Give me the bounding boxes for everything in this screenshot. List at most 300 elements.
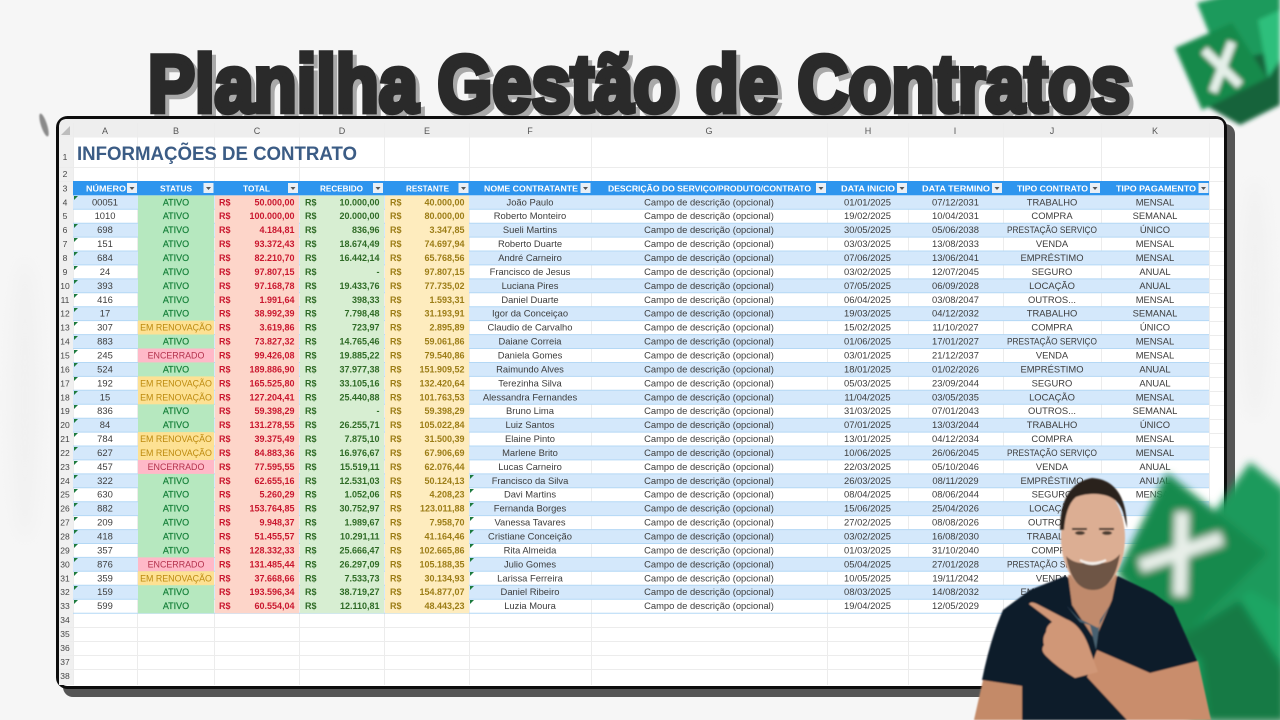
table row 11: Daniel Duarte — [501, 294, 559, 305]
table row 6: R$ — [305, 225, 317, 235]
table row 19: 31/03/2025 — [844, 405, 891, 416]
table row 24: 62.655,16 — [254, 476, 294, 486]
table row 17 — [97, 377, 1171, 388]
table row 12: ATIVO — [163, 309, 189, 319]
row numbers: 2 — [63, 169, 68, 179]
table row 15: 03/01/2025 — [844, 350, 891, 360]
table row 9: 24 — [100, 266, 110, 277]
table row 18: R$ — [219, 392, 231, 402]
table row 19: 836 — [97, 405, 113, 416]
table row 5: SEMANAL — [1133, 210, 1177, 221]
table row 12: 19/03/2025 — [844, 308, 891, 319]
table row 23: R$ — [219, 462, 231, 472]
sheet heading: INFORMAÇÕES DE CONTRATO — [77, 143, 357, 165]
table row 18: MENSAL — [1136, 391, 1174, 402]
table row 12: Campo de descrição (opcional) — [644, 308, 774, 319]
table row 20 — [100, 419, 1170, 430]
table row 28: TRABALHO — [1027, 530, 1077, 542]
table row 12: Igor da Conceiçao — [492, 308, 568, 319]
table row 15: R$ — [305, 350, 317, 360]
table row 16: 01/02/2026 — [932, 363, 979, 374]
table row 28: R$ — [219, 532, 231, 542]
table row 22: 627 — [97, 447, 113, 458]
table row 8: EMPRÉSTIMO — [1020, 252, 1084, 263]
table row 16: 151.909,52 — [419, 364, 464, 374]
table row 4: 50.000,00 — [254, 197, 294, 207]
table row 26: 123.011,88 — [420, 504, 464, 514]
table row 7: 74.697,94 — [424, 239, 464, 249]
table row 14: 883 — [97, 336, 113, 346]
table row 15: VENDA — [1036, 350, 1069, 360]
table row 26: 25/04/2026 — [932, 503, 979, 514]
table row 30: 26.297,09 — [339, 559, 380, 569]
table row 32: Campo de descrição (opcional) — [644, 586, 774, 597]
row numbers — [60, 152, 70, 681]
table row 22: Marlene Brito — [502, 447, 558, 458]
table row 19: Bruno Lima — [506, 405, 555, 416]
table row 22: 84.883,36 — [254, 448, 294, 458]
table row 22: MENSAL — [1136, 447, 1174, 458]
table row 5: R$ — [390, 211, 402, 221]
table row 26: R$ — [390, 504, 402, 514]
table row 32: ATIVO — [163, 587, 189, 597]
table row 20: 13/03/2044 — [932, 419, 979, 430]
table row 25: R$ — [305, 490, 317, 500]
table row 17: R$ — [219, 378, 231, 388]
table row 12 — [100, 308, 1177, 319]
table row 12: 38.992,39 — [254, 309, 294, 319]
row numbers: 24 — [60, 476, 70, 486]
table row 20: 07/01/2025 — [844, 419, 891, 430]
table row 33: Luzia Moura — [504, 600, 557, 611]
table row 25: 1.052,06 — [344, 490, 380, 500]
table row 30: R$ — [390, 559, 402, 569]
table row 10: R$ — [219, 281, 231, 291]
table row 18 — [100, 391, 1174, 402]
table row 27: 1.989,67 — [344, 518, 380, 528]
table row 15: R$ — [390, 350, 402, 360]
table row 28: 16/08/2030 — [932, 530, 979, 542]
table row 28: Campo de descrição (opcional) — [644, 530, 774, 542]
table row 25: R$ — [390, 490, 402, 500]
head — [1060, 478, 1127, 590]
table row 12: 17 — [100, 308, 110, 319]
table row 21: EM RENOVAÇÃO — [140, 434, 212, 444]
table row 33: ATIVO — [163, 601, 189, 611]
table row 32: 154.877,07 — [419, 587, 464, 597]
table row 5: ATIVO — [163, 211, 189, 221]
table row 26: R$ — [305, 504, 317, 514]
table row 17: R$ — [305, 378, 317, 388]
table row 19 — [97, 405, 1177, 416]
table row 16: 37.977,38 — [339, 364, 380, 374]
table row 25: ATIVO — [163, 490, 189, 500]
table row 30: 131.485,44 — [249, 559, 294, 569]
table row 7: R$ — [390, 239, 402, 249]
table row 14: R$ — [219, 336, 231, 346]
column letter header bar: J — [1050, 126, 1054, 136]
row numbers: 20 — [60, 420, 70, 430]
row numbers: 35 — [60, 629, 70, 639]
table header row — [73, 181, 1209, 195]
table row 33 — [97, 600, 979, 611]
table row 29: 128.332,33 — [249, 545, 294, 555]
table row 4: 01/01/2025 — [844, 196, 891, 207]
table row 28: ATIVO — [163, 532, 189, 542]
table row 32: R$ — [390, 587, 402, 597]
table row 4: 40.000,00 — [424, 197, 464, 207]
table row 29: Rita Almeida — [504, 544, 557, 555]
table row 7 — [97, 238, 1174, 249]
table row 13: 723,97 — [352, 323, 380, 333]
table row 29: 357 — [97, 544, 113, 555]
table row 19: ATIVO — [163, 406, 189, 416]
table row 11 — [97, 294, 1174, 305]
table row 25: 08/04/2025 — [844, 489, 891, 500]
table row 12: R$ — [390, 309, 402, 319]
table row 8: 13/06/2041 — [932, 252, 979, 263]
table row 6: 30/05/2025 — [844, 224, 891, 235]
table row 13 — [97, 322, 1170, 333]
table row 26: ATIVO — [163, 504, 189, 514]
table row 4: 07/12/2031 — [932, 196, 979, 207]
table row 31: 7.533,73 — [344, 573, 380, 583]
table row 29: COMPRA — [1031, 544, 1073, 555]
table row 13: COMPRA — [1031, 322, 1073, 333]
table row 29: 102.665,86 — [419, 545, 464, 555]
table row 15: R$ — [219, 350, 231, 360]
table row 17: 192 — [97, 377, 113, 388]
table row 7: MENSAL — [1136, 238, 1174, 249]
row numbers: 27 — [60, 518, 70, 528]
table row 16 — [97, 363, 1171, 374]
table row 10: 07/05/2025 — [844, 280, 891, 291]
table row 12: R$ — [219, 309, 231, 319]
table row 8: R$ — [219, 253, 231, 263]
table row 19: SEMANAL — [1133, 405, 1177, 416]
column letter header bar — [59, 119, 1224, 685]
table row 21: 39.375,49 — [254, 434, 294, 444]
table row 22: R$ — [305, 448, 317, 458]
table row 6: R$ — [219, 225, 231, 235]
table row 25: R$ — [219, 490, 231, 500]
table row 15 — [97, 350, 1174, 360]
table header row: TIPO CONTRATO — [1017, 184, 1089, 194]
table row 13: Campo de descrição (opcional) — [644, 322, 774, 333]
table row 27: 209 — [97, 517, 113, 528]
table row 31: 19/11/2042 — [932, 572, 979, 583]
table row 23: 62.076,44 — [424, 462, 464, 472]
table row 16: 18/01/2025 — [844, 363, 891, 374]
table row 8: ATIVO — [163, 253, 189, 263]
table row 32 — [97, 586, 1084, 597]
table row 26: 15/06/2025 — [844, 503, 891, 514]
table row 22: R$ — [219, 448, 231, 458]
table row 14: R$ — [390, 336, 402, 346]
table row 24: 26/03/2025 — [844, 475, 891, 486]
table row 28: R$ — [305, 532, 317, 542]
table row 14: R$ — [305, 336, 317, 346]
table row 23: R$ — [305, 462, 317, 472]
table row 4: R$ — [219, 197, 231, 207]
row numbers: 31 — [60, 573, 70, 583]
table row 33: 599 — [97, 600, 113, 611]
table row 31: R$ — [219, 573, 231, 583]
table row 24: R$ — [219, 476, 231, 486]
table row 7: 93.372,43 — [254, 239, 294, 249]
table row 9: 97.807,15 — [254, 267, 294, 277]
table row 11: MENSAL — [1136, 294, 1174, 305]
table row 20: R$ — [390, 420, 402, 430]
table row 33: 48.443,23 — [424, 601, 464, 611]
table row 14: 59.061,86 — [424, 336, 464, 346]
column letter header bar: K — [1152, 126, 1158, 136]
table row 31: 37.668,66 — [254, 573, 294, 583]
table row 27: 27/02/2025 — [844, 517, 891, 528]
table row 30: Julio Gomes — [504, 558, 556, 569]
table row 8: MENSAL — [1136, 252, 1174, 263]
table row 18: LOCAÇÃO — [1029, 391, 1075, 402]
table row 24: 322 — [97, 475, 113, 486]
table row 30: R$ — [219, 559, 231, 569]
table row 13: Claudio de Carvalho — [488, 322, 572, 333]
table row 30: R$ — [305, 559, 317, 569]
row numbers: 6 — [63, 225, 68, 235]
table row 27: Vanessa Tavares — [494, 517, 566, 528]
table row 32: 14/08/2032 — [932, 586, 979, 597]
table row 33: R$ — [305, 601, 317, 611]
table row 11: 1.991,64 — [259, 295, 294, 305]
table row 10: 77.735,02 — [424, 281, 464, 291]
table row 7: Campo de descrição (opcional) — [644, 238, 774, 249]
table row 31: 359 — [97, 572, 113, 583]
table row 10: 393 — [97, 280, 113, 291]
table row 23: ENCERRADO — [148, 462, 204, 472]
table row 16: 189.886,90 — [249, 364, 294, 374]
table row 32: R$ — [219, 587, 231, 597]
table row 11: R$ — [390, 295, 402, 305]
table row 4: TRABALHO — [1027, 196, 1077, 207]
table row 24: R$ — [390, 476, 402, 486]
table row 13: ÚNICO — [1140, 322, 1170, 333]
table row 9: ANUAL — [1139, 266, 1171, 277]
table row 14: PRESTAÇÃO SERVIÇO — [1007, 336, 1097, 346]
table row 30: ENCERRADO — [148, 559, 204, 569]
table row 23: R$ — [390, 462, 402, 472]
table row 9: SEGURO — [1032, 266, 1072, 277]
table row 5: R$ — [219, 211, 231, 221]
table row 30: 876 — [97, 558, 113, 569]
table row 6: PRESTAÇÃO SERVIÇO — [1007, 224, 1097, 235]
row numbers: 28 — [60, 532, 70, 542]
table row 9: R$ — [219, 267, 231, 277]
table row 20: R$ — [305, 420, 317, 430]
row numbers: 25 — [60, 490, 70, 500]
table row 18: EM RENOVAÇÃO — [140, 392, 212, 402]
row numbers: 26 — [60, 504, 70, 514]
table row 9 — [100, 266, 1171, 277]
row numbers: 29 — [60, 545, 70, 555]
table row 17: SEGURO — [1032, 377, 1072, 388]
table row 16: ATIVO — [163, 364, 189, 374]
row numbers: 11 — [61, 295, 70, 305]
column letter header bar: A — [102, 126, 108, 136]
table row 15: 21/12/2037 — [932, 350, 979, 360]
column letter header bar: H — [865, 126, 871, 136]
table row 7: 03/03/2025 — [844, 238, 891, 249]
table row 22: Campo de descrição (opcional) — [644, 447, 774, 458]
table row 4: 10.000,00 — [339, 197, 380, 207]
table row 19: 59.398,29 — [424, 406, 464, 416]
table row 20: Campo de descrição (opcional) — [644, 419, 774, 430]
title: Planilha Gestão de Contratos: Planilha Gestão de Contratos — [152, 44, 1134, 134]
table row 30: 05/04/2025 — [844, 558, 891, 569]
table row 18: R$ — [390, 392, 402, 402]
table row 9: 03/02/2025 — [844, 266, 891, 277]
table row 4: Campo de descrição (opcional) — [644, 196, 774, 207]
table row 14: MENSAL — [1136, 336, 1174, 346]
table row 13: R$ — [305, 323, 317, 333]
row numbers: 8 — [63, 253, 68, 263]
table row 25: SEGURO — [1032, 489, 1072, 500]
table row 33: 12/05/2029 — [932, 600, 979, 611]
row numbers: 12 — [60, 309, 70, 319]
table row 18: Alessandra Fernandes — [483, 391, 577, 402]
row numbers: 10 — [60, 281, 70, 291]
table row 20: 26.255,71 — [339, 420, 380, 430]
table row 6: Sueli Martins — [503, 224, 557, 235]
table row 29: 01/03/2025 — [844, 544, 891, 555]
table row 14: 73.827,32 — [254, 336, 294, 346]
table row 16: EMPRÉSTIMO — [1020, 363, 1084, 374]
table row 32: EMPRÉSTIMO — [1020, 586, 1084, 597]
table row 22: 10/06/2025 — [844, 447, 891, 458]
table row 19: - — [376, 406, 380, 416]
table row 26: R$ — [219, 504, 231, 514]
table row 11: R$ — [219, 295, 231, 305]
table row 14: ATIVO — [163, 336, 189, 346]
table row 14: Daiane Correia — [498, 336, 562, 346]
polo shirt — [982, 576, 1198, 720]
table row 14: Campo de descrição (opcional) — [644, 336, 774, 346]
row separators — [73, 209, 1209, 613]
table row 27: R$ — [390, 518, 402, 528]
table row 16: R$ — [219, 364, 231, 374]
table row 21: R$ — [305, 434, 317, 444]
table row 28: 51.455,57 — [254, 532, 294, 542]
table row 18: Campo de descrição (opcional) — [644, 391, 774, 402]
table row 26: LOCAÇÃO — [1029, 503, 1075, 514]
table row 23: 457 — [97, 461, 113, 472]
table row 15: 79.540,86 — [424, 350, 464, 360]
table row 5: Roberto Monteiro — [494, 210, 566, 221]
table row 24: 08/11/2029 — [932, 475, 979, 486]
table row 6 — [97, 224, 1170, 235]
table row 30 — [97, 558, 1097, 569]
table row 12: TRABALHO — [1027, 308, 1077, 319]
table row 24: R$ — [305, 476, 317, 486]
table header row: NÚMERO — [86, 182, 127, 194]
table row 22: 16.976,67 — [339, 448, 380, 458]
table row 21: Elaine Pinto — [505, 433, 555, 444]
table row 17: 33.105,16 — [339, 378, 380, 388]
title: Planilha Gestão de Contratos: Planilha Gestão de Contratos — [148, 40, 1130, 130]
table row 13: 307 — [97, 322, 113, 333]
table row 29: ATIVO — [163, 545, 189, 555]
table row 5: 100.000,00 — [249, 211, 294, 221]
table header row: DESCRIÇÃO DO SERVIÇO/PRODUTO/CONTRATO — [608, 184, 812, 194]
table row 33: 19/04/2025 — [844, 600, 891, 611]
table row 15: Campo de descrição (opcional) — [644, 350, 774, 360]
table row 22: EM RENOVAÇÃO — [140, 448, 212, 458]
table row 10: ANUAL — [1139, 280, 1171, 291]
table row 16: 524 — [97, 363, 113, 374]
table row 12: 31.193,91 — [424, 309, 464, 319]
row numbers: 32 — [60, 587, 70, 597]
table row 5: Campo de descrição (opcional) — [644, 210, 774, 221]
row numbers: 36 — [60, 643, 70, 653]
table row 29 — [97, 544, 1073, 555]
table row 25 — [97, 489, 1174, 500]
row numbers: 14 — [60, 336, 70, 346]
table row 28: 418 — [97, 530, 113, 542]
table row 32: 159 — [97, 586, 113, 597]
column letter header bar: B — [173, 126, 179, 136]
column letter header bar: D — [339, 126, 346, 136]
table row 32: R$ — [305, 587, 317, 597]
table row 9: R$ — [390, 267, 402, 277]
table row 21: 31.500,39 — [424, 434, 464, 444]
table row 14: 14.765,46 — [339, 336, 380, 346]
table row 27 — [97, 517, 1076, 528]
table row 33: Campo de descrição (opcional) — [644, 600, 774, 611]
table row 14: 17/01/2027 — [932, 336, 979, 346]
table row 14: 01/06/2025 — [844, 336, 891, 346]
table row 18: 11/04/2025 — [844, 391, 891, 402]
table row 23 — [97, 461, 1171, 472]
table row 15: ENCERRADO — [148, 350, 204, 360]
table row 13: 3.619,86 — [259, 323, 294, 333]
table row 26: Campo de descrição (opcional) — [644, 503, 774, 514]
table row 9: R$ — [305, 267, 317, 277]
table row 25: Campo de descrição (opcional) — [644, 489, 774, 500]
table row 7: ATIVO — [163, 239, 189, 249]
table row 13: 2.895,89 — [429, 323, 464, 333]
table row 15: 19.885,22 — [339, 350, 380, 360]
table row 19: 59.398,29 — [254, 406, 294, 416]
pointing hand — [1029, 602, 1098, 678]
row numbers: 9 — [63, 267, 68, 277]
table row 20: ATIVO — [163, 420, 189, 430]
table row 22: 67.906,69 — [424, 448, 464, 458]
table row 24: EMPRÉSTIMO — [1020, 475, 1084, 486]
row numbers: 21 — [60, 434, 70, 444]
table row 20: TRABALHO — [1027, 419, 1077, 430]
row numbers: 37 — [60, 657, 70, 667]
table row 5: 20.000,00 — [339, 211, 380, 221]
table row 33: R$ — [390, 601, 402, 611]
table row 7: Roberto Duarte — [498, 238, 562, 249]
table row 27: 7.958,70 — [429, 518, 464, 528]
table row 33: 60.554,04 — [254, 601, 294, 611]
table row 21: 7.875,10 — [344, 434, 380, 444]
table row 31: 10/05/2025 — [844, 572, 891, 583]
table row 25: MENSAL — [1136, 489, 1174, 500]
table row 13: 11/10/2027 — [932, 322, 979, 333]
table row 11: 1.593,31 — [429, 295, 464, 305]
row numbers: 34 — [60, 615, 70, 625]
collar placket — [1066, 605, 1110, 650]
